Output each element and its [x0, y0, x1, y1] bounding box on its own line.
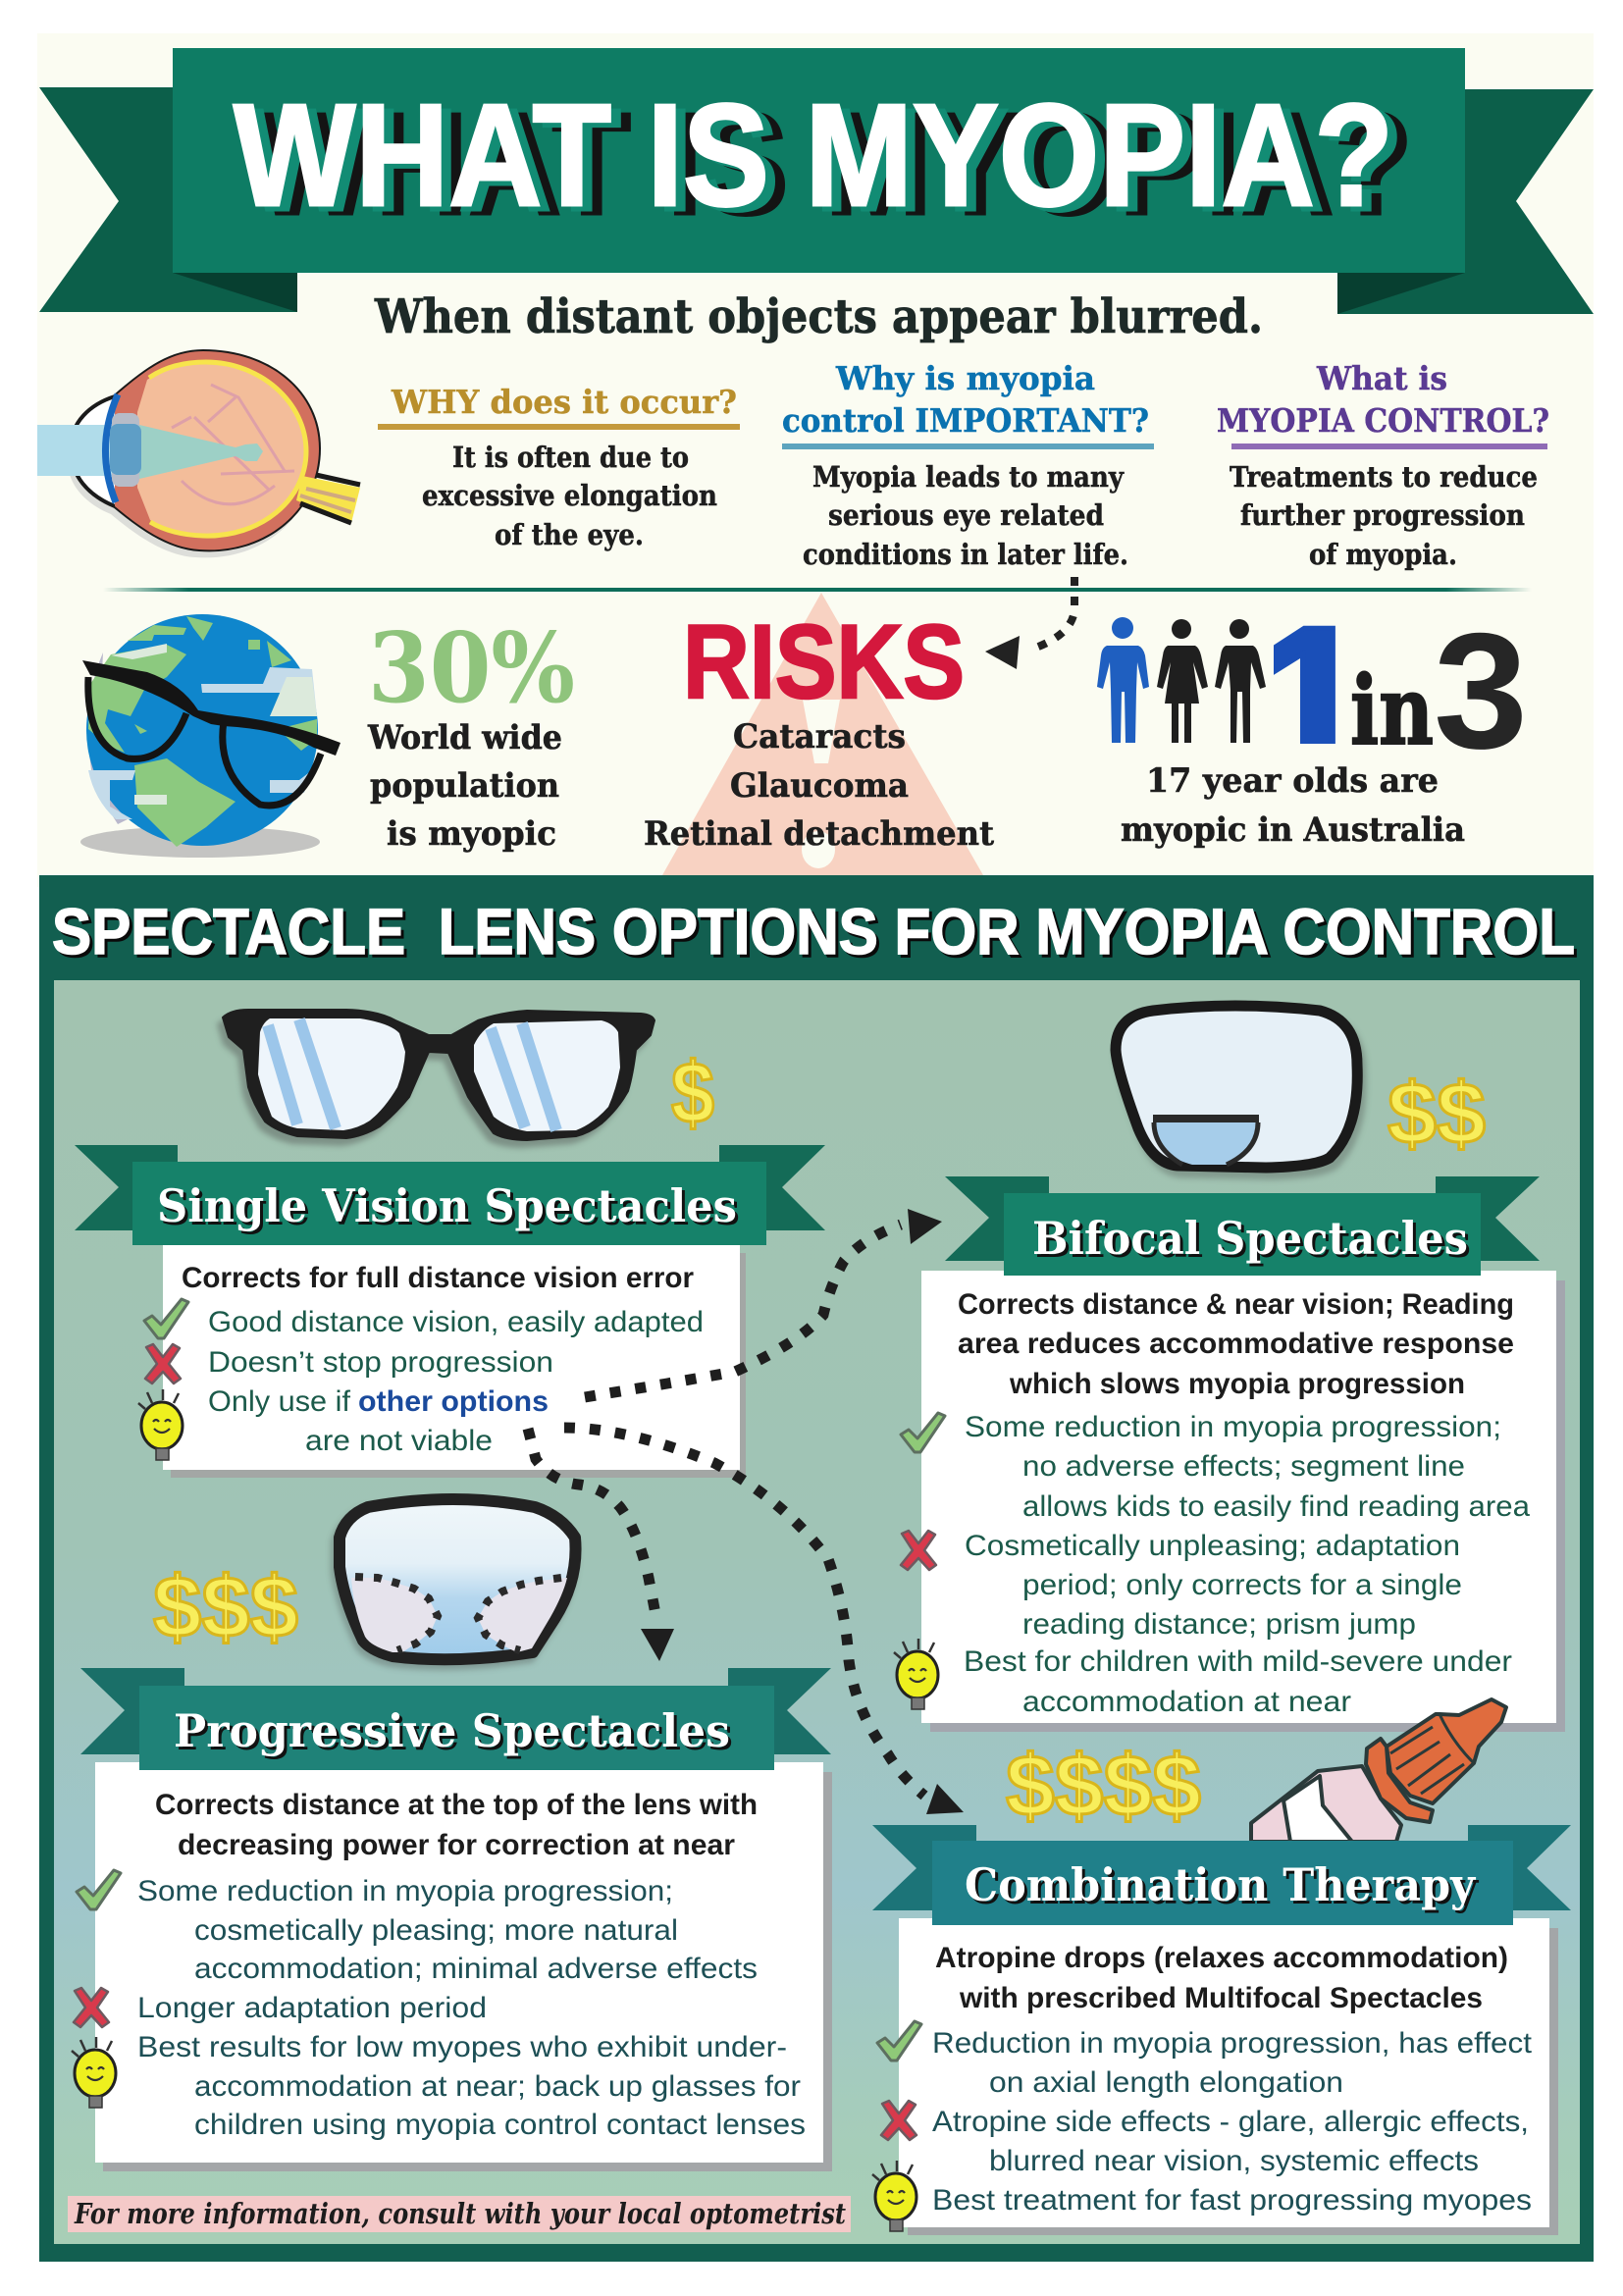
risks heading: RISKS	[683, 602, 965, 720]
heading: What is	[1316, 359, 1447, 397]
icon: bulb	[138, 1389, 183, 1460]
statistic: 1 in 3: 1	[1251, 580, 1374, 827]
description: Corrects distance & near vision; Reading	[958, 1288, 1514, 1321]
pros: Some reduction in myopia progression;	[965, 1411, 1501, 1443]
banner	[75, 1145, 825, 1245]
panel: bifocal spectacles	[894, 1176, 1565, 1732]
tip: are not viable	[305, 1425, 493, 1457]
heading: control IMPORTANT?	[782, 401, 1149, 440]
description: with prescribed Multifocal Spectacles	[959, 1982, 1483, 2014]
icon: eye drop bottle	[1251, 1699, 1506, 1842]
description: area reduces accommodative response	[958, 1328, 1514, 1360]
panel: progressive spectacles	[72, 1668, 832, 2171]
banner: Single Vision Spectacles	[157, 1179, 737, 1232]
heading: MYOPIA CONTROL?	[1217, 401, 1549, 440]
icon: three people	[1097, 617, 1266, 743]
body text: It is often due to	[452, 441, 689, 474]
cost: two dollars: $$	[1387, 1065, 1486, 1162]
banner	[80, 1668, 831, 1770]
caption: population	[370, 766, 559, 806]
title text: WHAT IS MYOPIA?	[234, 75, 1393, 236]
icon: eye cross-section	[37, 351, 360, 557]
title ribbon	[39, 48, 1594, 314]
icon: bulb	[894, 1639, 938, 1709]
body text: excessive elongation	[422, 479, 717, 512]
title text: WHAT IS MYOPIA?	[253, 83, 1413, 245]
pros: Some reduction in myopia progression;	[137, 1875, 673, 1907]
column: why important	[782, 359, 1154, 571]
icon: progressive lens	[340, 1499, 576, 1659]
icon: cross	[901, 1531, 936, 1570]
cost: four dollars: $$$$	[1006, 1737, 1201, 1834]
icon: globe with glasses	[80, 614, 340, 858]
banner: Combination Therapy	[965, 1858, 1476, 1911]
body text	[422, 441, 717, 551]
tip: accommodation at near; back up glasses for	[194, 2070, 801, 2103]
column: what is myopia control	[1217, 359, 1549, 571]
banner: Combination Therapy	[968, 1861, 1479, 1914]
pros	[932, 2027, 1533, 2099]
pros: cosmetically pleasing; more natural	[194, 1914, 678, 1947]
description: Corrects for full distance vision error	[182, 1262, 694, 1294]
panel: single vision spectacles	[75, 1145, 825, 1478]
tip: Best results for low myopes who exhibit under-	[137, 2031, 787, 2063]
arrow: important to risks	[985, 577, 1074, 669]
pros: accommodation; minimal adverse effects	[194, 1953, 758, 1985]
risks list: Glaucoma	[730, 766, 909, 806]
body text: conditions in later life.	[803, 538, 1128, 571]
arrow: single vision to bifocal	[585, 1209, 942, 1397]
body text: Treatments to reduce	[1230, 460, 1538, 494]
pros: on axial length elongation	[989, 2066, 1343, 2099]
body text: Myopia leads to many	[812, 460, 1125, 494]
cons: Atropine side effects - glare, allergic effects,	[932, 2106, 1529, 2138]
caption: World wide	[367, 718, 562, 757]
heading	[1217, 359, 1549, 440]
caption	[367, 718, 562, 854]
page background	[37, 33, 1594, 887]
pros: Reduction in myopia progression, has effect	[932, 2027, 1533, 2060]
male figure	[1215, 619, 1266, 743]
cost: one dollar: $	[671, 1044, 714, 1141]
arrow: single vision to combination	[564, 1428, 964, 1814]
banner: Progressive Spectacles	[177, 1707, 733, 1760]
description	[935, 1942, 1508, 2014]
risks list: Retinal detachment	[644, 814, 994, 854]
body text: of myopia.	[1309, 538, 1457, 571]
description	[958, 1288, 1514, 1400]
icon: cross	[74, 1988, 109, 2027]
cons	[965, 1530, 1462, 1641]
title text: WHAT IS MYOPIA?	[243, 79, 1403, 241]
cons	[932, 2106, 1529, 2177]
tip: Best treatment for fast progressing myopes	[932, 2184, 1532, 2217]
cons: period; only corrects for a single	[1022, 1569, 1462, 1601]
icon: cross	[145, 1344, 181, 1383]
banner	[945, 1176, 1540, 1276]
body text	[1230, 460, 1538, 571]
panel: combination therapy	[872, 1825, 1571, 2235]
statistic: 30 percent: 30%	[368, 612, 575, 725]
banner	[872, 1825, 1571, 1925]
banner: Bifocal Spectacles	[1035, 1215, 1471, 1268]
caption	[1121, 761, 1465, 850]
statistic: 30 percent	[367, 612, 575, 854]
heading	[782, 359, 1149, 440]
body text: serious eye related	[828, 498, 1104, 532]
warning triangle	[662, 593, 983, 875]
subtitle: When distant objects appear blurred.	[374, 289, 1263, 344]
banner: Bifocal Spectacles	[1032, 1212, 1468, 1265]
statistic: 1 in 3: in	[1350, 655, 1434, 766]
cons: blurred near vision, systemic effects	[989, 2145, 1479, 2177]
statistic: 1 in 3: 3	[1434, 599, 1528, 783]
icon: check	[144, 1299, 188, 1338]
icon: bulb	[872, 2161, 916, 2231]
caption: 17 year olds are	[1146, 761, 1439, 801]
icon: cross	[881, 2101, 916, 2140]
arrow: single vision to progressive	[528, 1429, 674, 1661]
body text: of the eye.	[495, 518, 644, 551]
dress figure	[1157, 619, 1208, 743]
icon: bulb	[72, 2037, 116, 2108]
statistic: 1 in 3	[1121, 626, 1522, 849]
body text: further progression	[1240, 498, 1525, 532]
banner: Single Vision Spectacles	[160, 1182, 740, 1235]
caption: is myopic	[387, 814, 556, 854]
heading: Why is myopia	[835, 359, 1095, 397]
icon: bifocal lens	[1116, 1006, 1357, 1168]
pro: Good distance vision, easily adapted	[208, 1306, 704, 1338]
tip	[208, 1385, 549, 1457]
con: Longer adaptation period	[137, 1992, 487, 2024]
pros: no adverse effects; segment line	[1022, 1450, 1465, 1483]
tip: accommodation at near	[1022, 1686, 1351, 1718]
description: Corrects distance at the top of the lens with	[155, 1789, 758, 1821]
description: decreasing power for correction at near	[178, 1829, 735, 1861]
risks list: Cataracts	[733, 717, 906, 757]
icon: single vision glasses	[223, 1010, 654, 1140]
tip: other options	[358, 1385, 549, 1418]
tip: children using myopia control contact lenses	[194, 2109, 806, 2141]
pros: allows kids to easily find reading area	[1022, 1490, 1530, 1523]
description: which slows myopia progression	[1009, 1368, 1465, 1400]
heading: WHY does it occur?	[391, 383, 737, 421]
description	[155, 1789, 758, 1861]
icon: check	[901, 1413, 945, 1452]
icon: check	[77, 1870, 121, 1909]
blue figure	[1097, 617, 1149, 743]
panel: risks	[644, 593, 994, 875]
tip	[964, 1645, 1512, 1718]
cost: three dollars: $$$	[153, 1558, 298, 1655]
pros	[965, 1411, 1530, 1523]
panel: spectacle lens options	[39, 875, 1594, 2262]
risks list	[644, 717, 994, 854]
banner: Progressive Spectacles	[174, 1704, 730, 1757]
tip: Best for children with mild-severe under	[964, 1645, 1512, 1678]
tip: Only use if	[208, 1385, 351, 1418]
body text	[803, 460, 1128, 571]
column: why does it occur	[378, 383, 740, 551]
caption: myopic in Australia	[1121, 810, 1465, 850]
pros	[137, 1875, 758, 1985]
tip	[137, 2031, 806, 2141]
description: Atropine drops (relaxes accommodation)	[935, 1942, 1508, 1974]
footer note: For more information, consult with your local optometrist	[74, 2197, 846, 2230]
cons: Cosmetically unpleasing; adaptation	[965, 1530, 1460, 1562]
icon: check	[877, 2021, 921, 2061]
cons: reading distance; prism jump	[1022, 1608, 1416, 1641]
con: Doesn’t stop progression	[208, 1346, 553, 1379]
